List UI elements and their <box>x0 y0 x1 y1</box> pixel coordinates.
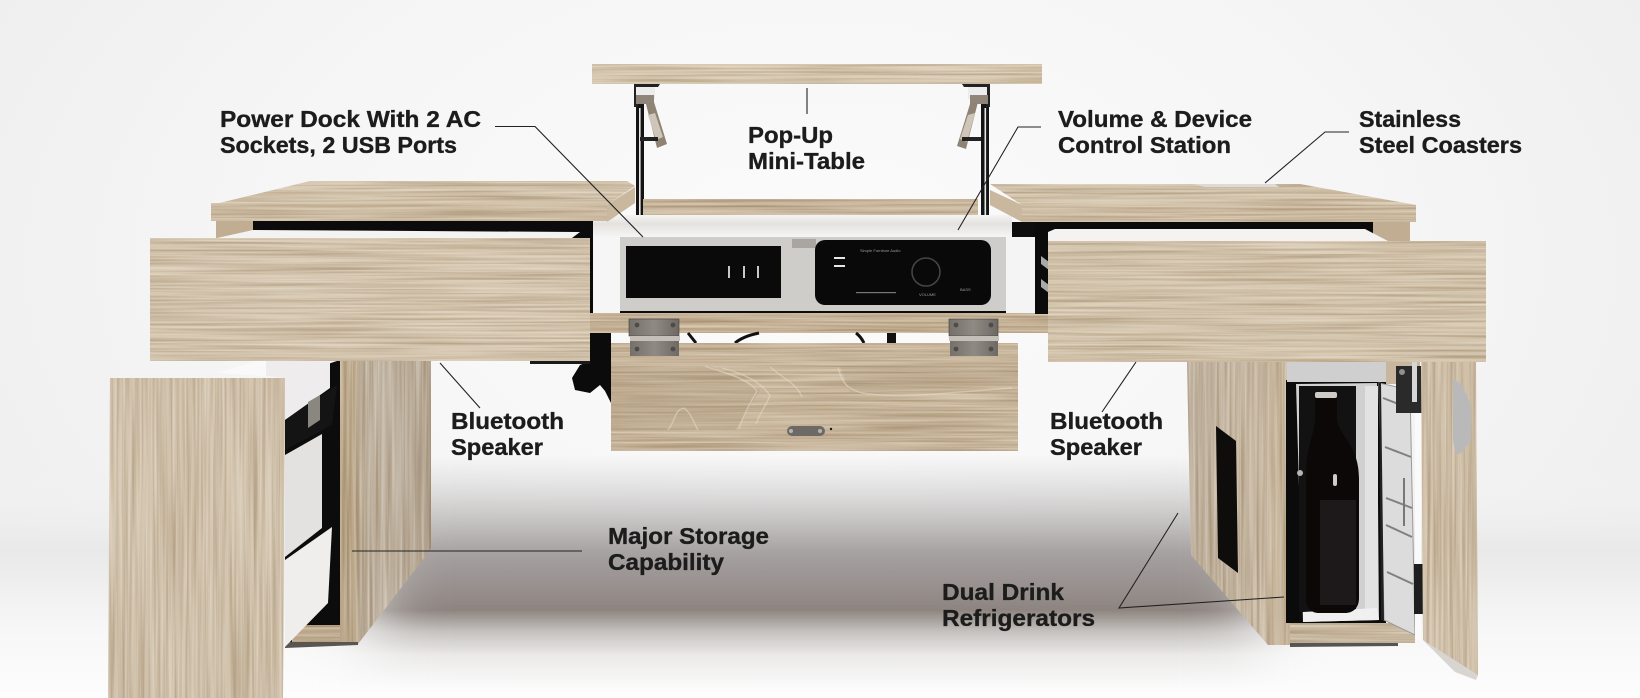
callout: dual drink refrigerators: Refrigerators <box>942 605 1095 631</box>
cathedral grain <box>668 366 1012 430</box>
drawer slide <box>285 385 337 450</box>
open door <box>1421 362 1478 675</box>
foot shadow <box>285 642 358 648</box>
right desktop top <box>990 184 1416 205</box>
drink bottle <box>1297 392 1359 613</box>
fridge cavity <box>1286 380 1386 623</box>
frame base <box>292 625 340 642</box>
callout: volume and device control: Volume & Device <box>1058 106 1252 132</box>
drawer inner white <box>217 230 580 238</box>
back board <box>643 199 978 216</box>
foot shadow <box>1290 643 1398 647</box>
black hardware under shelf <box>572 333 611 403</box>
left desktop top <box>211 181 635 205</box>
callout: volume and device control: Control Station <box>1058 132 1231 158</box>
callout: stainless steel coasters: Steel Coasters <box>1359 132 1522 158</box>
cables <box>688 333 864 343</box>
pedestal side <box>1187 362 1268 645</box>
power dock <box>626 246 781 298</box>
fridge liner right wall <box>1365 386 1378 620</box>
white gap <box>1415 413 1421 640</box>
panel: right pedestal <box>1187 362 1478 680</box>
lower fridge hinge <box>1414 564 1423 614</box>
callout: power dock: Sockets, 2 USB Ports <box>220 132 457 158</box>
wood shelf <box>590 313 1050 333</box>
callout: power dock <box>220 106 643 237</box>
callout: dual drink refrigerators: Dual Drink <box>942 579 1064 605</box>
pedestal frame <box>340 360 358 643</box>
flap latch <box>787 426 832 436</box>
drawer slide highlight <box>308 395 320 428</box>
flap dark grain band <box>611 366 760 430</box>
control station: Simple Furniture Audio <box>860 248 901 253</box>
right desktop front edge <box>1022 205 1416 222</box>
right drawer front <box>1048 241 1486 362</box>
side speaker grille <box>1216 426 1238 573</box>
drawer box lower <box>285 434 322 557</box>
mini-table top <box>592 64 1042 84</box>
white lid strip <box>593 215 1012 237</box>
front frame <box>1268 362 1290 645</box>
grip marks <box>1041 256 1049 293</box>
callout: left bluetooth speaker: Bluetooth <box>451 408 564 434</box>
recess left edge <box>1035 222 1049 314</box>
floor shadow <box>370 455 1260 698</box>
callout: pop-up mini-table: Mini-Table <box>748 148 865 174</box>
callout: power dock: Power Dock With 2 AC <box>220 106 481 132</box>
cabinet interior <box>285 360 340 642</box>
left drawer front <box>150 238 590 361</box>
base frame <box>1290 623 1415 643</box>
control station: BASS <box>960 287 971 292</box>
left cabinet door <box>108 378 285 698</box>
left desktop wedge <box>607 187 635 222</box>
wood stub <box>216 221 253 238</box>
callout: major storage: Capability <box>608 549 724 575</box>
pedestal side <box>358 360 431 644</box>
callout: pop-up mini-table: Pop-Up <box>748 122 833 148</box>
left desktop front edge <box>211 203 607 221</box>
panel: left pedestal <box>108 360 431 698</box>
callout: left bluetooth speaker <box>440 363 564 460</box>
callout: pop-up mini-table <box>748 88 865 174</box>
left white post <box>593 237 620 315</box>
left hinge <box>629 319 680 356</box>
wood stile right of cavity <box>1386 362 1420 384</box>
control station <box>815 240 991 305</box>
wood stub <box>1373 222 1410 242</box>
callout: left bluetooth speaker: Speaker <box>451 434 543 460</box>
right white post <box>1006 237 1035 315</box>
recess right edge <box>589 221 593 313</box>
upper metal band <box>1287 362 1386 382</box>
door handle <box>1453 378 1471 455</box>
black recess <box>1035 222 1375 242</box>
panel: central console <box>590 199 1050 333</box>
black recess <box>253 221 593 239</box>
control station: VOLUME <box>919 292 936 297</box>
drawer box upper <box>217 360 330 420</box>
console face <box>620 237 1006 311</box>
drawer inner white <box>1048 229 1388 241</box>
callout: right bluetooth speaker: Bluetooth <box>1050 408 1163 434</box>
thin black under drawer <box>530 361 590 364</box>
callout: major storage: Major Storage <box>608 523 769 549</box>
lid chamfer <box>990 190 1022 222</box>
cable block <box>887 333 896 343</box>
callout: volume and device control <box>958 106 1252 230</box>
panel: folded flap <box>530 319 1018 451</box>
callout: stainless steel coasters: Stainless <box>1359 106 1461 132</box>
panel: pop-up mini-table <box>592 64 1042 220</box>
flap dark grain band right <box>840 366 1018 392</box>
fridge dark back <box>1299 386 1356 612</box>
callout: dual drink refrigerators <box>942 513 1284 631</box>
panel: right desktop and drawer <box>990 184 1486 362</box>
fridge floor <box>1303 608 1379 622</box>
fridge door <box>1379 383 1415 635</box>
clip on console <box>792 239 816 248</box>
callout: stainless steel coasters <box>1265 106 1522 183</box>
callout: right bluetooth speaker: Speaker <box>1050 434 1142 460</box>
flap wood <box>611 343 1018 451</box>
drawer wall upper <box>217 360 285 378</box>
right hinge <box>949 319 999 356</box>
callout: major storage <box>352 523 769 575</box>
floor tint <box>0 470 1640 698</box>
fridge liner <box>1296 383 1379 622</box>
door shadow <box>1423 640 1478 680</box>
callout: right bluetooth speaker <box>1050 362 1163 460</box>
stainless steel coaster <box>1193 184 1279 187</box>
right lift arm <box>957 84 990 220</box>
upper fridge hinge <box>1396 362 1422 413</box>
panel: left desktop and drawer <box>150 181 635 361</box>
left lift arm <box>634 84 667 220</box>
drawer front lower <box>285 527 332 647</box>
cabinet black back <box>590 222 1040 314</box>
